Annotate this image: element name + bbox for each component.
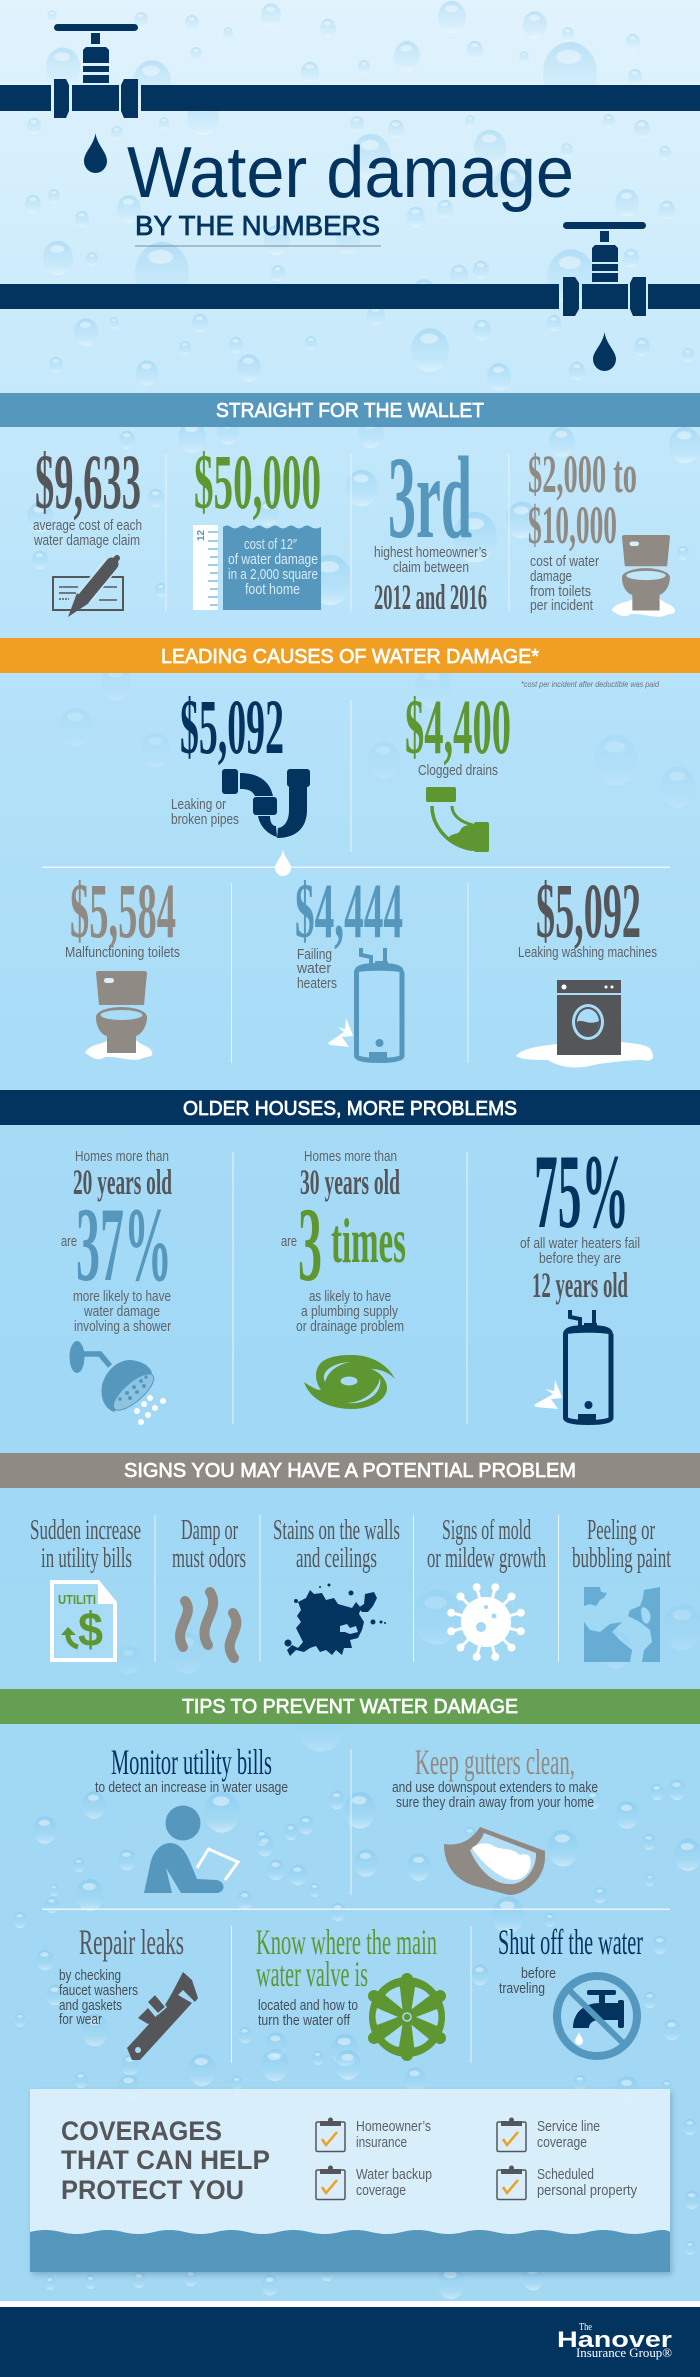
coverage: service line: coverage	[537, 2135, 587, 2151]
footer	[0, 2307, 700, 2377]
cause: water heaters: water	[296, 961, 331, 977]
cause: toilets	[65, 867, 180, 1060]
icon: toilet	[612, 535, 675, 617]
panel: wallet stats: $9,633	[35, 438, 141, 525]
icon: water heater	[328, 948, 404, 1061]
stat: toilets: damage	[530, 569, 572, 585]
panel: older houses	[61, 1133, 640, 1425]
icon: wrench	[127, 1972, 198, 2060]
coverages heading: THAT CAN HELP	[61, 2145, 270, 2175]
white strip above footer	[0, 2301, 700, 2307]
column: 30 years old: or drainage problem	[296, 1319, 404, 1335]
panel: leading causes	[42, 683, 670, 1067]
cause: pipes	[171, 683, 310, 838]
column: 20 years old	[61, 1149, 172, 1425]
column: 20 years old: involving a shower	[74, 1319, 171, 1335]
icon: mold spore	[447, 1583, 525, 1661]
coverage: scheduled personal property	[497, 2166, 638, 2200]
column: 30 years old: times	[331, 1205, 406, 1276]
column: 75 percent: before they are	[539, 1251, 621, 1267]
panel: coverages	[30, 2089, 670, 2272]
tip: main water valve: Know where the main	[256, 1922, 437, 1962]
stat: toilets: $10,000	[528, 495, 617, 555]
stat: 3rd: highest homeowner’s	[374, 545, 487, 561]
cause: pipes: Leaking or	[171, 797, 226, 813]
cause: washing machines	[516, 867, 657, 1067]
coverage: water backup: Water backup	[356, 2167, 432, 2183]
stat: 3rd	[374, 432, 487, 617]
tip: main water valve: turn the water off	[258, 2013, 351, 2029]
icon: gutter	[444, 1827, 545, 1895]
stat: 50,000: in a 2,000 square	[228, 567, 318, 583]
column: 30 years old: a plumbing supply	[301, 1304, 398, 1320]
column: 75 percent	[520, 1133, 640, 1423]
tip: monitor utility bills: Monitor utility bills	[111, 1742, 272, 1782]
stat: 50,000	[193, 438, 321, 610]
icon: utility bill	[52, 1582, 116, 1660]
coverage: water backup: coverage	[356, 2183, 406, 2199]
section header: tips	[0, 1689, 700, 1724]
sign: damp odors: must odors	[172, 1542, 246, 1574]
cause: toilets: $5,584	[70, 867, 176, 954]
tip: repair leaks: faucet washers	[59, 1983, 138, 1999]
stat: 3rd: 2012 and 2016	[374, 577, 487, 617]
column: 20 years old: are	[61, 1234, 77, 1250]
sign: damp odors	[172, 1514, 246, 1658]
column: 30 years old: are	[281, 1234, 297, 1250]
column: 30 years old	[281, 1149, 406, 1409]
icon: swirl	[304, 1355, 395, 1409]
tip: monitor utility bills	[95, 1742, 288, 1893]
coverage: water backup	[316, 2166, 432, 2200]
icon: ruler	[193, 525, 218, 610]
coverages heading	[61, 2116, 270, 2205]
cause: washing machines: Leaking washing machines	[518, 945, 657, 961]
column: 30 years old: 3	[298, 1186, 322, 1303]
icon: valve wheel	[368, 1973, 446, 2061]
stat: average claim: average cost of each	[33, 518, 142, 534]
icon: ruler: 12	[196, 529, 207, 541]
icon: utility bill: $	[78, 1604, 103, 1657]
stat: 50,000: of water damage	[228, 552, 318, 568]
title	[127, 133, 574, 246]
logo: The Hanover Insurance Group: The	[579, 2322, 592, 2333]
stat: toilets: per incident	[530, 598, 593, 614]
column: 30 years old: 30 years old	[300, 1162, 400, 1202]
section header: older houses: OLDER HOUSES, MORE PROBLEMS	[183, 1098, 517, 1120]
sign: stains	[273, 1514, 400, 1656]
sign: stains: Stains on the walls	[273, 1514, 400, 1546]
tip: keep gutters clean	[392, 1742, 598, 1895]
icon: water drop left	[84, 133, 107, 173]
logo: The Hanover Insurance Group	[557, 2322, 673, 2360]
icon: odor waves	[180, 1592, 236, 1658]
cause: pipes: broken pipes	[171, 812, 239, 828]
column: 75 percent: of all water heaters fail	[520, 1236, 640, 1252]
cause: water heaters: $4,444	[295, 867, 403, 954]
coverage: homeowner's insurance	[316, 2118, 431, 2152]
tip: main water valve: located and how to	[258, 1998, 358, 2014]
tip: repair leaks: and gaskets	[59, 1998, 122, 2014]
panel: signs	[30, 1514, 671, 1662]
icon: washing machine with puddle	[516, 980, 653, 1067]
sign: damp odors: Damp or	[181, 1514, 238, 1546]
tip: shut off the water: before	[521, 1966, 556, 1982]
stat: 50,000: cost of 12″	[244, 537, 297, 553]
tip: monitor utility bills: to detect an increase in water usage	[95, 1780, 288, 1796]
panel: wallet stats	[33, 432, 675, 617]
panel: tips	[42, 1742, 670, 2063]
icon: water heater navy	[534, 1310, 613, 1423]
tip: shut off the water: traveling	[499, 1981, 545, 1997]
sign: mold: Signs of mold	[442, 1514, 531, 1546]
icon: broken pipe	[222, 769, 310, 838]
coverage: homeowner's insurance: Homeowner’s	[356, 2119, 431, 2135]
icon: utility bill: UTILITI	[58, 1592, 96, 1607]
column: 30 years old: as likely to have	[309, 1289, 391, 1305]
tip: repair leaks: by checking	[59, 1968, 121, 1984]
sign: utility bills: Sudden increase	[30, 1514, 141, 1546]
water wave	[30, 2230, 670, 2272]
sign: mold: or mildew growth	[427, 1542, 546, 1574]
icon: water drop right	[593, 332, 616, 371]
tip: keep gutters clean: sure they drain away from your home	[396, 1795, 594, 1811]
panel: leading causes: $4,400	[405, 683, 511, 770]
cause: pipes: $5,092	[180, 683, 284, 770]
section header: leading causes: LEADING CAUSES OF WATER DAMAGE*	[161, 646, 539, 668]
section header: older houses	[0, 1090, 700, 1125]
cause: drains: Clogged drains	[418, 763, 498, 779]
sign: peeling paint	[572, 1514, 671, 1662]
sign: stains: and ceilings	[296, 1542, 377, 1574]
stat: toilets: from toilets	[530, 584, 591, 600]
cause: toilets: Malfunctioning toilets	[65, 945, 180, 961]
stat: average claim: water damage claim	[33, 533, 140, 549]
coverages heading: COVERAGES	[61, 2116, 222, 2146]
stat: 3rd: 3rd	[388, 432, 472, 563]
cause: water heaters: Failing	[297, 947, 332, 963]
tip: main water valve: water valve is	[256, 1954, 368, 1994]
panel: older houses: 37%	[76, 1186, 172, 1303]
cause: water heaters	[295, 867, 404, 1061]
tip: repair leaks: for wear	[59, 2012, 102, 2028]
section header: signs	[0, 1453, 700, 1488]
coverage: scheduled personal property: Scheduled	[537, 2167, 594, 2183]
cause: water heaters: heaters	[297, 976, 337, 992]
stat: toilets	[528, 444, 675, 617]
icon: toilet with puddle	[85, 971, 152, 1060]
top pipe with valve	[0, 24, 700, 118]
stat: average claim	[33, 438, 142, 549]
footnote: *cost per incident after deductible was paid	[521, 680, 659, 689]
water level box	[223, 526, 321, 610]
stat: 50,000: foot home	[245, 582, 300, 598]
icon: person with tablet	[144, 1806, 238, 1893]
stat: toilets: cost of water	[530, 554, 599, 570]
icon: check and pen	[53, 558, 123, 617]
tip: keep gutters clean: Keep gutters clean,	[415, 1742, 575, 1782]
sign: utility bills	[30, 1514, 141, 1660]
title: BY THE NUMBERS	[135, 210, 380, 241]
column: 20 years old: water damage	[83, 1304, 160, 1320]
section header: signs: SIGNS YOU MAY HAVE A POTENTIAL PROBLEM	[124, 1460, 576, 1482]
title: Water damage	[127, 133, 574, 213]
coverages heading: PROTECT YOU	[61, 2175, 244, 2205]
coverage: scheduled personal property: personal property	[537, 2183, 638, 2199]
sign: utility bills: in utility bills	[41, 1542, 132, 1574]
logo: The Hanover Insurance Group: Insurance Group®	[576, 2345, 672, 2360]
stat: 3rd: claim between	[393, 560, 469, 576]
icon: shower head	[70, 1341, 166, 1425]
column: 20 years old: more likely to have	[73, 1289, 171, 1305]
tip: shut off the water	[498, 1922, 643, 2056]
coverage: service line: Service line	[537, 2119, 600, 2135]
coverage: service line	[497, 2118, 600, 2152]
icon: clogged elbow	[426, 787, 489, 852]
tip: repair leaks	[59, 1922, 198, 2060]
section header: tips: TIPS TO PREVENT WATER DAMAGE	[182, 1696, 518, 1718]
section header: straight for the wallet	[0, 393, 700, 427]
tip: main water valve	[256, 1922, 446, 2061]
logo: The Hanover Insurance Group: Hanover	[557, 2327, 673, 2352]
section header: straight for the wallet: STRAIGHT FOR THE WALLET	[216, 400, 484, 422]
stat: 50,000: $50,000	[194, 438, 321, 525]
icon: peeling paint	[584, 1587, 660, 1662]
tip: repair leaks: Repair leaks	[79, 1922, 184, 1962]
column: 20 years old: Homes more than	[75, 1149, 169, 1165]
section header: leading causes	[0, 638, 700, 673]
icon: no water faucet	[557, 1976, 637, 2056]
column: 20 years old: 20 years old	[73, 1162, 172, 1202]
bottom pipe with valve	[0, 222, 700, 316]
icon: white drop divider	[275, 849, 291, 876]
tip: keep gutters clean: and use downspout extenders to make	[392, 1780, 598, 1796]
column: 30 years old: Homes more than	[304, 1149, 397, 1165]
sign: mold	[427, 1514, 546, 1661]
cause: drains	[405, 683, 511, 852]
icon: stain splat	[284, 1584, 386, 1656]
coverage: homeowner's insurance: insurance	[356, 2135, 407, 2151]
